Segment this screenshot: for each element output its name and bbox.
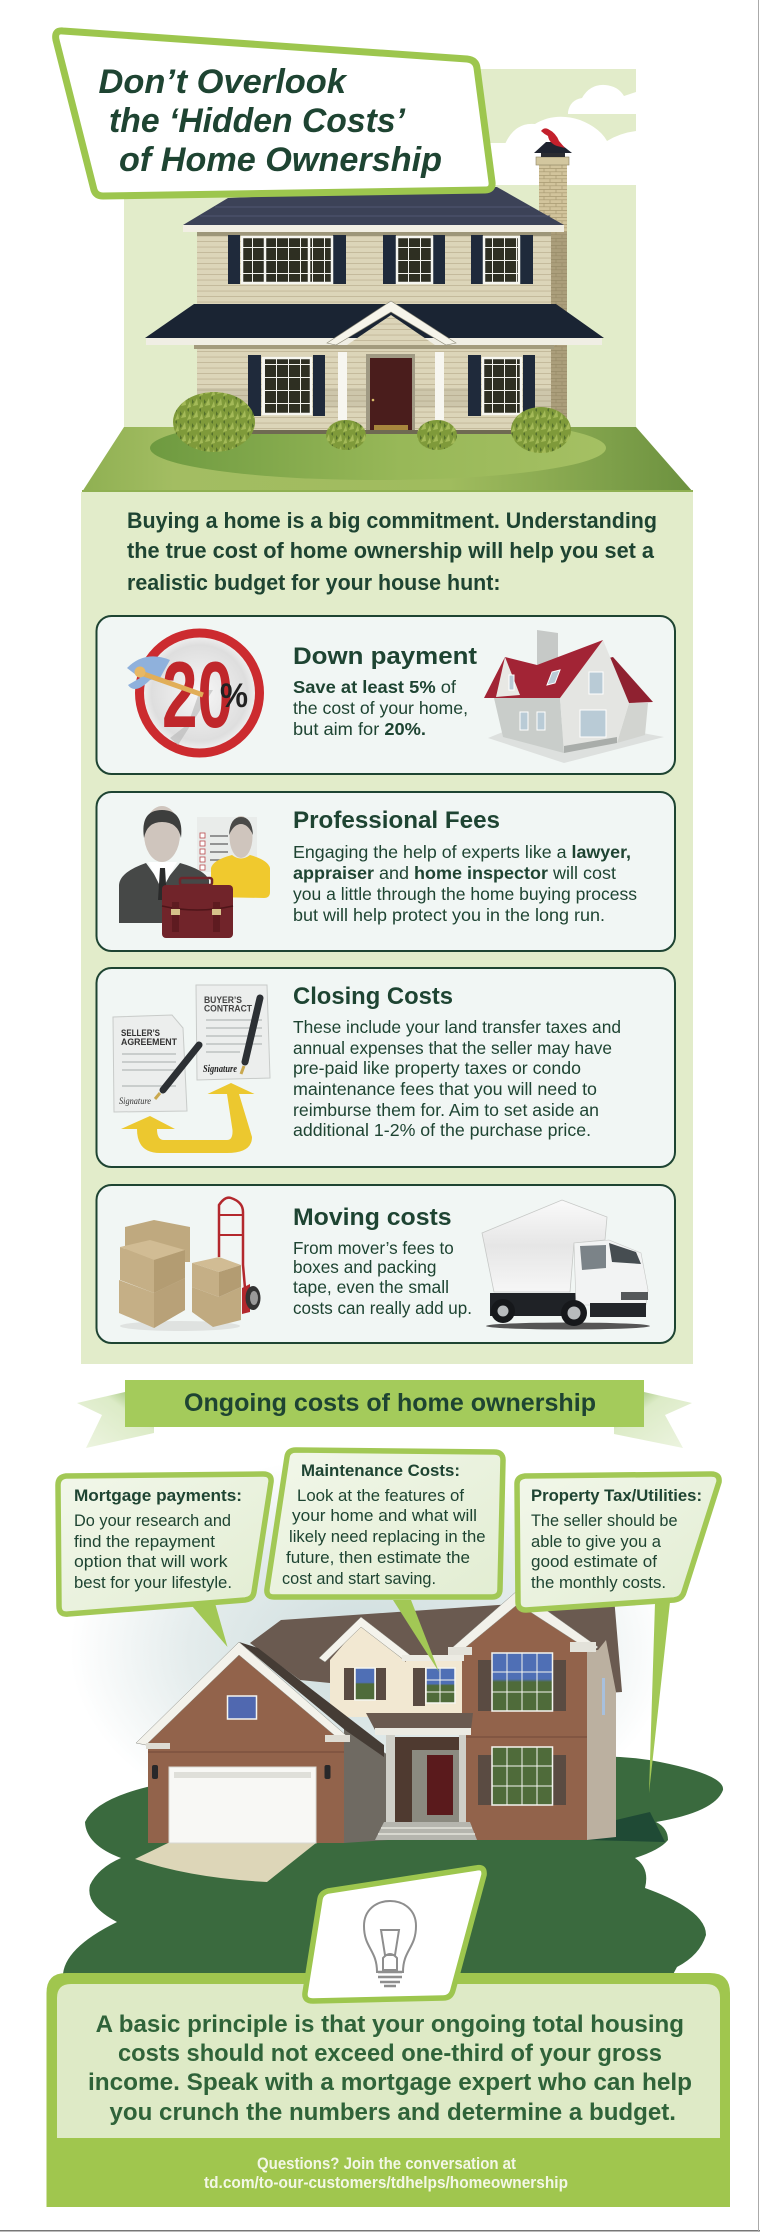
porch gable [327, 301, 456, 345]
callout: maintenance costs: cost and start saving. [282, 1570, 436, 1588]
icon: red-roofed house [484, 630, 664, 763]
body text: Engaging the help of experts like a lawyer, [293, 842, 631, 862]
body text: These include your land transfer taxes and [293, 1017, 621, 1037]
heading: Moving costs [293, 1204, 452, 1231]
icon: light bulb card [305, 1868, 484, 2001]
front door [366, 354, 415, 434]
ongoing costs ribbon [77, 1380, 692, 1448]
footer text: Questions? Join the conversation at [257, 2155, 516, 2173]
callout: property tax and utilities: the monthly costs. [531, 1574, 666, 1592]
callout: property tax and utilities [517, 1474, 719, 1793]
callout: property tax and utilities: able to give you a [531, 1533, 662, 1551]
icon: 20 percent dart target: % [220, 677, 248, 715]
cream dormer [330, 1624, 406, 1717]
icon: signed contracts and arrow: AGREEMENT [121, 1037, 177, 1048]
callout: maintenance costs: future, then estimate the [286, 1549, 470, 1567]
body text: but will help protect you in the long run. [293, 905, 605, 925]
icon: 20 percent dart target [127, 633, 260, 753]
title panel: the ‘Hidden Costs’ [109, 102, 406, 140]
callout: property tax and utilities: The seller should be [531, 1512, 678, 1530]
right wing windows [478, 1653, 566, 1805]
icon: signed contracts and arrow: Signature [203, 1064, 237, 1075]
principle text: you crunch the numbers and determine a budget. [110, 2099, 676, 2126]
callout: mortgage payments: option that will work [74, 1553, 228, 1571]
icon: signed contracts and arrow: CONTRACT [204, 1004, 252, 1014]
icon: 20 percent dart target: 20 [162, 642, 233, 747]
columns [338, 352, 347, 420]
body text: additional 1-2% of the purchase price. [293, 1120, 591, 1140]
wall lamps [152, 1765, 158, 1779]
sky backdrop with clouds [124, 69, 636, 427]
callout: mortgage payments [58, 1474, 271, 1647]
card: closing costs [96, 968, 675, 1167]
callout: maintenance costs: Maintenance Costs: [301, 1461, 460, 1480]
body text [293, 1238, 472, 1318]
icon: signed contracts and arrow [113, 985, 270, 1153]
intro text: realistic budget for your house hunt: [127, 570, 500, 595]
callout: mortgage payments: Mortgage payments: [74, 1486, 242, 1505]
garage block [148, 1650, 344, 1843]
body text: Save at least 5% of [293, 677, 456, 697]
principle text [88, 2011, 692, 2126]
body text: you a little through the home buying process [293, 884, 637, 904]
lower windows [263, 358, 521, 414]
heading: Closing Costs [293, 983, 453, 1010]
upper windows [242, 237, 519, 283]
callout: maintenance costs [267, 1450, 503, 1672]
panel: hidden costs [81, 490, 693, 1364]
card: down payment [96, 616, 675, 774]
chimney with cap [534, 142, 572, 420]
icon: signed contracts and arrow: Signature [119, 1096, 151, 1106]
garage side wall [344, 1725, 388, 1843]
intro text: the true cost of home ownership will help you set a [127, 538, 654, 563]
intro text: Buying a home is a big commitment. Understanding [127, 508, 657, 533]
icon: boxes and hand truck [119, 1198, 260, 1331]
lower shutters [248, 355, 535, 416]
body text: appraiser and home inspector will cost [293, 863, 616, 883]
heading: Professional Fees [293, 807, 500, 834]
callout: mortgage payments: best for your lifestyle. [74, 1574, 232, 1592]
icon: moving truck [482, 1200, 650, 1330]
shrubs [173, 392, 571, 453]
callout: maintenance costs: Look at the features of [297, 1487, 464, 1505]
title panel: Don’t Overlook [98, 63, 348, 101]
icon: signed contracts and arrow: BUYER’S [204, 995, 242, 1006]
title panel: of Home Ownership [119, 141, 442, 179]
driveway [135, 1843, 316, 1882]
bulb glyph [364, 1901, 416, 1986]
dark green ground [63, 1756, 723, 1980]
footer text: td.com/to-our-customers/tdhelps/homeownership [204, 2174, 568, 2192]
principle text: income. Speak with a mortgage expert who can help [88, 2069, 692, 2096]
icon: red bird [541, 128, 565, 148]
body text [293, 677, 468, 739]
ongoing costs ribbon: Ongoing costs of home ownership [184, 1389, 596, 1417]
callout: maintenance costs: your home and what will [292, 1507, 477, 1525]
panel: basic principle [46, 1973, 730, 2207]
body text: the cost of your home, [293, 698, 468, 718]
body text: reimburse them for. Aim to set aside an [293, 1100, 599, 1120]
callout: property tax and utilities: good estimate of [531, 1553, 657, 1571]
callout: mortgage payments: find the repayment [74, 1533, 215, 1551]
heading: Down payment [293, 643, 477, 670]
garage door [169, 1767, 316, 1843]
card: professional fees [96, 792, 675, 951]
body text: annual expenses that the seller may have [293, 1038, 612, 1058]
card: moving costs [96, 1185, 675, 1343]
body text: boxes and packing [293, 1257, 436, 1277]
right wing [462, 1597, 587, 1840]
callout: property tax and utilities: Property Tax/Utilities: [531, 1486, 702, 1505]
body text: From mover’s fees to [293, 1238, 454, 1258]
upper shutters [228, 235, 533, 284]
intro text [127, 508, 657, 595]
body text [293, 1017, 621, 1140]
body text: tape, even the small [293, 1277, 449, 1297]
main house illustration [145, 187, 604, 434]
lawn platform [82, 416, 693, 492]
title panel [56, 31, 492, 196]
callout: maintenance costs: likely need replacing in the [289, 1528, 486, 1546]
porch roof [145, 304, 604, 338]
body text: but aim for 20%. [293, 719, 426, 739]
icon: signed contracts and arrow: SELLER’S [121, 1028, 160, 1039]
principle text: A basic principle is that your ongoing total housing [96, 2011, 684, 2038]
principle text: costs should not exceed one-third of your gross [118, 2040, 662, 2067]
footer text [204, 2155, 568, 2192]
callout: mortgage payments: Do your research and [74, 1512, 231, 1530]
porch [366, 1713, 473, 1730]
brick house illustration [136, 1590, 665, 1843]
icon: professionals with briefcase [119, 806, 270, 938]
body text [293, 842, 637, 925]
body text: costs can really add up. [293, 1298, 472, 1318]
body text: maintenance fees that you will need to [293, 1079, 597, 1099]
background haze behind house [70, 1455, 670, 1845]
body text: pre-paid like property taxes or condo [293, 1058, 581, 1078]
